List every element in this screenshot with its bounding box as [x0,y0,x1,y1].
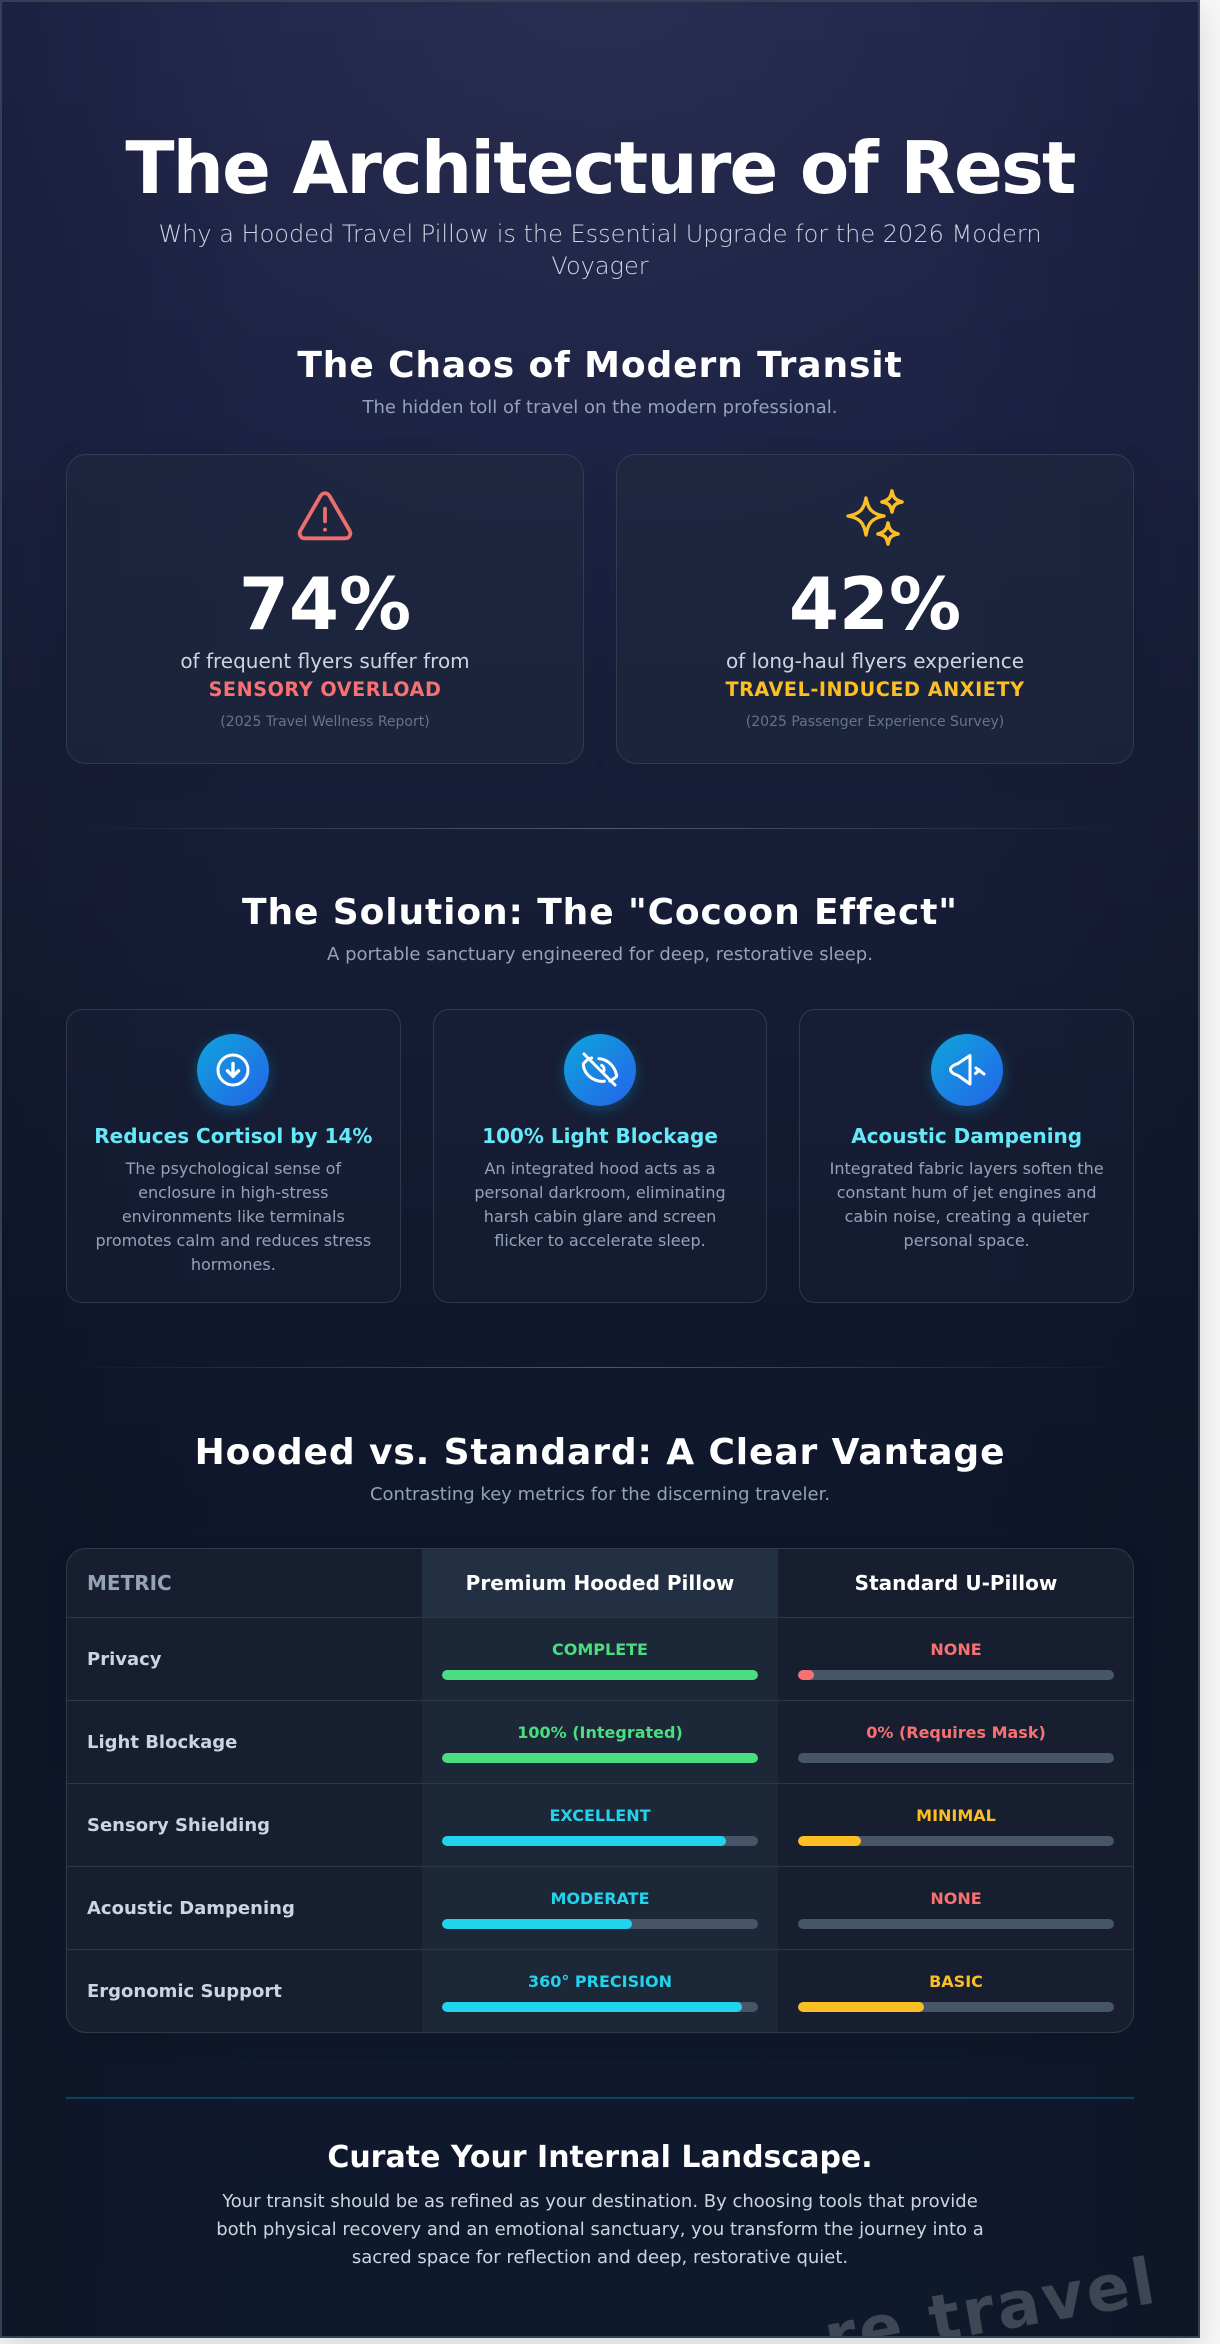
benefit text: An integrated hood acts as a [484,1159,716,1178]
stat highlight: TRAVEL-INDUCED ANXIETY [725,678,1025,701]
header: metric: METRIC [87,1571,172,1595]
hooded value: ergonomic support: 360° PRECISION [528,1972,672,1991]
benefit text: flicker to accelerate sleep. [494,1231,706,1250]
panel: sensory overload stat [66,454,584,764]
panel: travel anxiety stat [616,454,1134,764]
standard value: privacy: NONE [930,1640,982,1659]
subtitle: Why a Hooded Travel Pillow is the Essential Upgrade for the 2026 Modern [158,220,1042,248]
panel: cortisol benefit [66,1009,401,1303]
panel: light blockage benefit [433,1009,767,1303]
benefit text: cabin noise, creating a quieter [845,1207,1089,1226]
section intro: chaos: The hidden toll of travel on the modern professional. [363,397,837,418]
row label: acoustic dampening: Acoustic Dampening [87,1898,295,1919]
hooded value: ergonomic support [442,1972,758,2012]
benefit title: 100% Light Blockage [482,1124,718,1148]
hooded value: privacy: COMPLETE [552,1640,648,1659]
icon: arrow down circle [197,1034,269,1106]
row label: ergonomic support: Ergonomic Support [87,1981,282,2002]
stat text: of frequent flyers suffer from [180,649,470,673]
title: The Architecture of Rest [125,126,1075,210]
benefit text: promotes calm and reduces stress [95,1231,371,1250]
section intro: solution: A portable sanctuary engineered for deep, restorative sleep. [327,944,873,965]
standard value: light blockage: 0% (Requires Mask) [866,1723,1046,1742]
benefit text: environments like terminals [122,1207,345,1226]
closing paragraph [216,2191,984,2268]
closing heading: Curate Your Internal Landscape. [327,2140,873,2175]
stat source: (2025 Passenger Experience Survey) [746,714,1004,730]
benefit text: personal darkroom, eliminating [474,1183,726,1202]
benefit title: Acoustic Dampening [851,1124,1082,1148]
benefit title: Reduces Cortisol by 14% [94,1124,372,1148]
standard value: privacy [798,1640,1114,1680]
closing paragraph: Your transit should be as refined as your destination. By choosing tools that provide [222,2191,978,2212]
hooded value: privacy [442,1640,758,1680]
stat number: 74% [239,562,411,646]
stat number: 42% [789,562,961,646]
benefit text: Integrated fabric layers soften the [830,1159,1104,1178]
header: standard u-pillow: Standard U-Pillow [855,1571,1057,1595]
stat text: of long-haul flyers experience [726,649,1024,673]
closing paragraph: sacred space for reflection and deep, restorative quiet. [352,2247,848,2268]
header: premium hooded pillow: Premium Hooded Pillow [466,1571,734,1595]
row label: light blockage: Light Blockage [87,1732,237,1753]
icon: muted speaker [931,1034,1003,1106]
standard value: sensory shielding [798,1806,1114,1846]
heading: chaos of modern transit: The Chaos of Modern Transit [297,345,903,386]
panel: acoustic benefit [799,1009,1134,1303]
heading: cocoon effect: The Solution: The "Cocoon Effect" [242,892,958,933]
hooded value: sensory shielding: EXCELLENT [550,1806,650,1825]
benefit text: personal space. [904,1231,1030,1250]
icon: sparkles [846,489,904,546]
benefit text [830,1159,1104,1250]
stat highlight: SENSORY OVERLOAD [209,678,441,701]
row label: privacy: Privacy [87,1649,162,1670]
icon: warning triangle [298,491,352,540]
subtitle [158,220,1042,280]
hooded value: light blockage: 100% (Integrated) [517,1723,683,1742]
hooded value: acoustic dampening: MODERATE [550,1889,650,1908]
standard value: sensory shielding: MINIMAL [916,1806,996,1825]
benefit text: harsh cabin glare and screen [484,1207,716,1226]
subtitle: Voyager [551,252,649,280]
benefit text: enclosure in high-stress [138,1183,328,1202]
benefit text [95,1159,371,1274]
standard value: ergonomic support: BASIC [929,1972,983,1991]
hooded value: sensory shielding [442,1806,758,1846]
standard value: ergonomic support [798,1972,1114,2012]
icon: eye off [564,1034,636,1106]
stat source: (2025 Travel Wellness Report) [220,714,430,730]
benefit text: constant hum of jet engines and [837,1183,1097,1202]
standard value: acoustic dampening: NONE [930,1889,982,1908]
hooded value: light blockage [442,1723,758,1763]
benefit text [474,1159,726,1250]
row label: sensory shielding: Sensory Shielding [87,1815,270,1836]
comparison table [66,1548,1134,2033]
closing paragraph: both physical recovery and an emotional sanctuary, you transform the journey into a [216,2219,984,2240]
hooded value: acoustic dampening [442,1889,758,1929]
heading: comparison: Hooded vs. Standard: A Clear Vantage [195,1432,1005,1473]
section intro: comparison: Contrasting key metrics for the discerning traveler. [370,1484,830,1505]
benefit text: hormones. [191,1255,276,1274]
benefit text: The psychological sense of [126,1159,341,1178]
